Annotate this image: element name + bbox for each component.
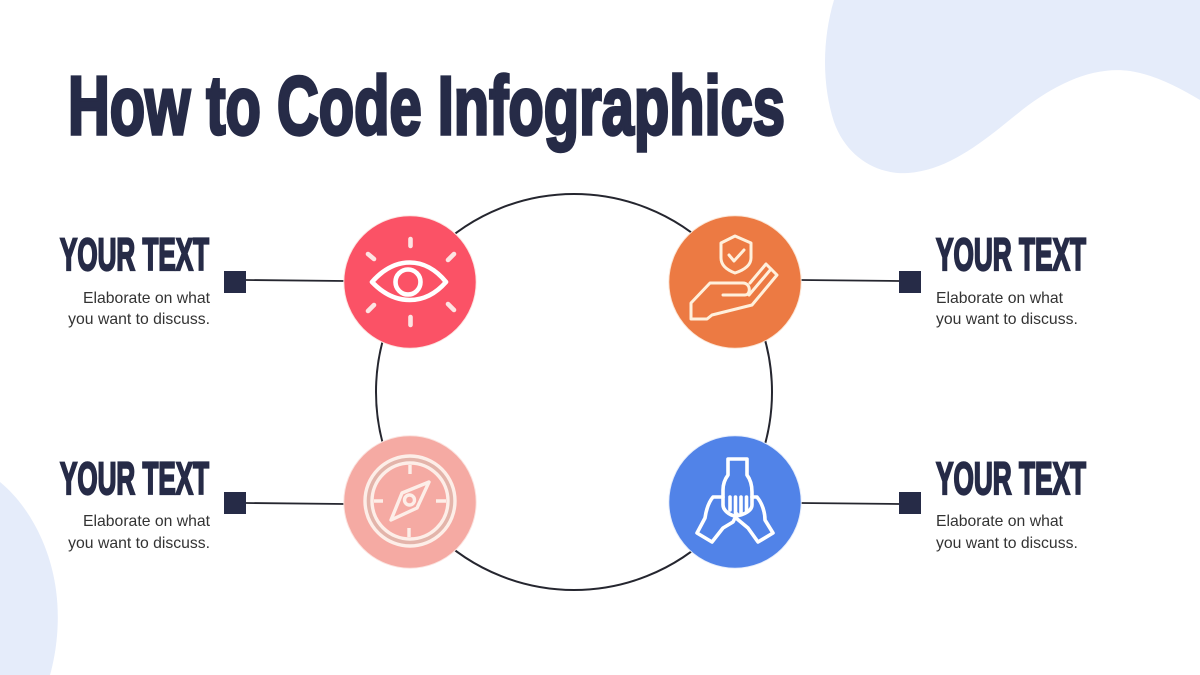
text block: top left: Elaborate on what	[83, 290, 211, 307]
text block: top left: you want to discuss.	[68, 311, 210, 328]
connector: bottom right	[800, 492, 921, 514]
item: bottom right	[669, 436, 1086, 568]
icon: eye	[344, 216, 476, 348]
text block: bottom right: you want to discuss.	[936, 535, 1078, 552]
heading: bottom right: YOUR TEXT	[936, 453, 1086, 504]
background blob: top right	[825, 0, 1200, 173]
connector: top left	[224, 271, 345, 293]
background blob: bottom left	[0, 482, 58, 675]
heading: top right: YOUR TEXT	[936, 229, 1086, 280]
connector: bottom left	[224, 492, 345, 514]
connector: top right	[800, 271, 921, 293]
item: bottom left	[60, 436, 476, 568]
icon: hand with shield	[669, 216, 801, 348]
heading: bottom left: YOUR TEXT	[60, 453, 209, 504]
icon: compass	[344, 436, 476, 568]
text block: top right: you want to discuss.	[936, 311, 1078, 328]
heading: top left: YOUR TEXT	[60, 229, 209, 280]
text block: bottom right: Elaborate on what	[936, 513, 1064, 530]
title: How to Code Infographics	[68, 59, 785, 152]
item: top right	[669, 216, 1086, 348]
central ring	[376, 194, 772, 590]
icon: joined hands	[669, 436, 801, 568]
text block: bottom left: you want to discuss.	[68, 535, 210, 552]
item: top left	[60, 216, 476, 348]
text block: top right: Elaborate on what	[936, 290, 1064, 307]
text block: bottom left: Elaborate on what	[83, 513, 211, 530]
